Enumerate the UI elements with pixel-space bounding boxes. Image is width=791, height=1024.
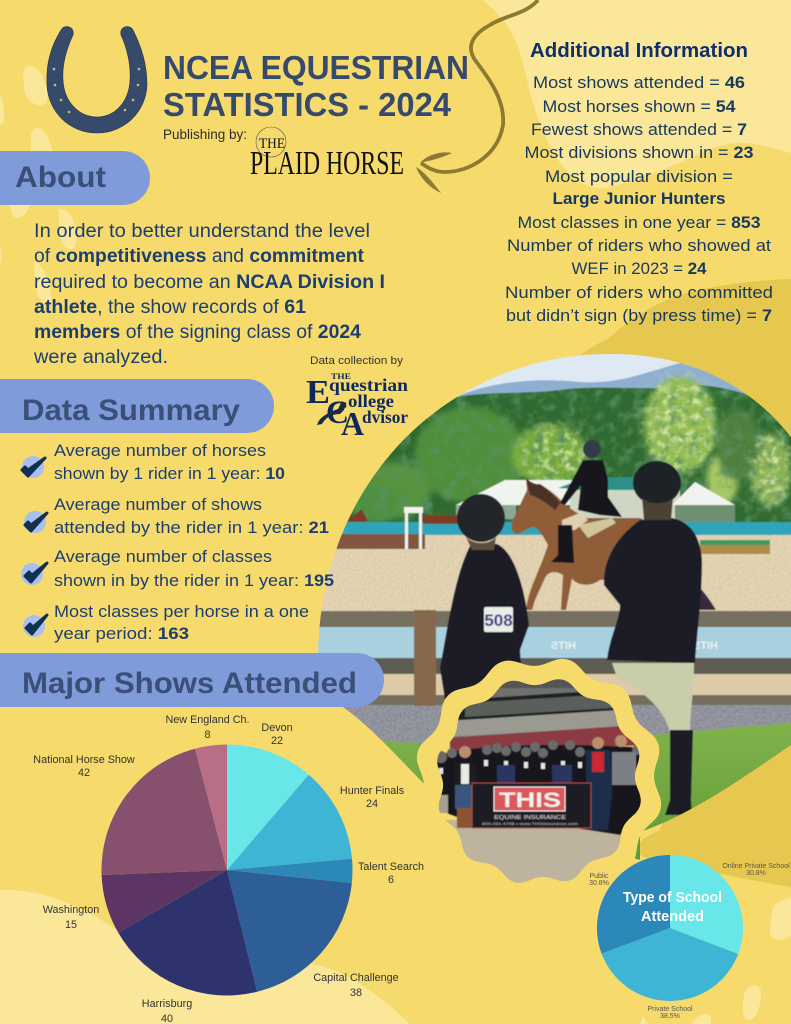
pie labels (33, 714, 424, 1024)
far riders (345, 509, 368, 522)
item: classes per horse: year period: 163 (54, 624, 189, 643)
text block: about (33, 221, 385, 368)
chart labels: 30.8% (746, 870, 766, 877)
stat list: Large Junior Hunters (552, 189, 726, 208)
stat list: Most shows attended = 46 (533, 73, 745, 92)
logo: The Equestrian College Advisor: A (341, 406, 364, 443)
chart title: Attended (641, 909, 704, 925)
photo: team with THIS banner: EQUINE INSURANCE (494, 815, 566, 821)
panel: about heading: About (15, 161, 106, 194)
logo: The Plaid Horse (250, 127, 404, 182)
horse (510, 478, 644, 610)
sand arena (300, 535, 791, 615)
photo: riders at horse show (300, 350, 791, 860)
data collection credit: Data collection by (310, 355, 404, 367)
standing rider left (440, 544, 529, 700)
logo: The Equestrian College Advisor: E (306, 374, 330, 411)
item: classes shown: Average number of classes (54, 547, 272, 566)
title: NCEA EQUESTRIAN (163, 49, 469, 86)
publishing credit: Publishing by: (163, 127, 247, 142)
pie labels: 22 (271, 735, 283, 747)
stat list: Number of riders who showed at (507, 236, 771, 255)
logo: The Equestrian College Advisor: C (326, 395, 349, 431)
scalloped frame (389, 631, 689, 931)
pie labels: New England Ch. (165, 714, 250, 726)
item: classes shown: shown in by the rider in 1 year: 195 (54, 571, 334, 590)
pie labels: Talent Search (358, 861, 424, 873)
title (163, 49, 469, 123)
logo: The Equestrian College Advisor: ollege (348, 391, 394, 411)
horse tail (698, 588, 716, 611)
stat list: Fewest shows attended = 7 (531, 120, 747, 139)
pie labels: 42 (78, 767, 90, 779)
photo: riders at horse show: 508 (484, 611, 513, 630)
item: classes per horse (23, 602, 309, 643)
icon: check (23, 615, 47, 637)
gravel (343, 704, 791, 744)
pie labels: Devon (261, 722, 293, 734)
stat list: but didn’t sign (by press time) = 7 (506, 306, 772, 325)
stat list: Most horses shown = 54 (542, 97, 736, 116)
pie labels: 15 (65, 919, 77, 931)
team group (434, 745, 645, 835)
logo: The Equestrian College Advisor (306, 372, 408, 443)
text block: about: were analyzed. (33, 347, 168, 368)
chart title (623, 890, 722, 925)
left riders breeches (436, 795, 448, 813)
photo: team with THIS banner: 800-261-4708 • www.THISInsurance.com (482, 822, 578, 826)
stat list: Most classes in one year = 853 (518, 213, 760, 232)
pie labels: Hunter Finals (340, 785, 405, 797)
chart title: Type of School (623, 890, 722, 906)
item: horses shown: Average number of horses (54, 441, 266, 460)
photo: riders at horse show: HITS (693, 640, 718, 652)
grass (382, 722, 791, 860)
fence post (414, 610, 436, 706)
breeches and boots (612, 663, 694, 732)
text block: about: In order to better understand the level (34, 221, 370, 242)
stat list: Most divisions shown in = 23 (524, 143, 754, 162)
pie labels: 24 (366, 798, 378, 810)
stat list: Number of riders who committed (505, 283, 773, 302)
heading: additional information: Additional Information (530, 40, 748, 62)
white gate (404, 507, 423, 549)
icon: horseshoe (47, 27, 147, 133)
text block: about: of competitiveness and commitment (34, 246, 365, 267)
chart labels: 38.5% (660, 1013, 680, 1020)
sky (456, 354, 681, 398)
background blob: light top right (483, 0, 791, 188)
logo: The Equestrian College Advisor: THE (331, 372, 351, 381)
horse rider (551, 440, 622, 563)
fence and banner (300, 611, 791, 628)
trainer figures (586, 750, 612, 830)
item: classes shown (21, 547, 334, 590)
stat list: WEF in 2023 = 24 (572, 259, 707, 278)
standing rider right (604, 518, 702, 663)
pie labels: 8 (204, 729, 211, 741)
stat list (505, 73, 773, 325)
text block: about: members of the signing class of 2024 (34, 322, 361, 343)
tree line (348, 384, 791, 523)
item: classes per horse: Most classes per horse in a one (54, 602, 309, 621)
logo: The Equestrian College Advisor: questrian (329, 375, 408, 395)
item: shows attended: attended by the rider in 1 year: 21 (54, 518, 329, 537)
pie chart: type of school attended (589, 855, 790, 1020)
background blob: light lower left (0, 890, 410, 1024)
pie labels: Capital Challenge (313, 972, 399, 984)
panel: data summary heading (0, 379, 274, 433)
photo: riders at horse show: HITS (551, 640, 576, 652)
item: shows attended (24, 495, 329, 537)
item: shows attended: Average number of shows (54, 495, 262, 514)
text block: about: athlete, the show records of 61 (34, 297, 306, 318)
icon: check (21, 563, 47, 585)
text block: about: required to become an NCAA Division I (34, 272, 385, 293)
photo: team with THIS banner: THIS (499, 789, 561, 812)
pie labels: Washington (43, 904, 99, 916)
decorative squiggle arrow (416, 0, 538, 193)
icon: check (22, 456, 45, 478)
logo: The Plaid Horse: PLAID HORSE (250, 145, 404, 182)
item: horses shown: shown by 1 rider in 1 year: 10 (54, 464, 285, 483)
pie labels: National Horse Show (33, 754, 135, 766)
pie chart: major shows attended (33, 714, 424, 1024)
panel: data summary heading: Data Summary (22, 394, 240, 427)
background blob: dark right (580, 279, 791, 887)
logo: The Plaid Horse: THE (259, 136, 285, 152)
number 508 (484, 607, 513, 632)
sand ground (445, 820, 621, 883)
sponsor banner (472, 783, 591, 828)
tents (456, 480, 580, 505)
panel: additional information (505, 40, 773, 325)
chart labels: Private School (647, 1006, 693, 1013)
logo: The Equestrian College Advisor: dvisor (362, 407, 408, 427)
woman at front (455, 762, 478, 785)
stat list: Most popular division = (545, 167, 733, 186)
photo: team with THIS banner (437, 679, 641, 883)
chart labels: 30.8% (589, 880, 609, 887)
list: data summary (21, 441, 334, 643)
chart labels (589, 863, 790, 1020)
panel: major shows heading: Major Shows Attended (22, 667, 357, 700)
pie labels: 6 (388, 874, 394, 886)
title: STATISTICS - 2024 (163, 86, 452, 123)
pie labels: 38 (350, 987, 362, 999)
arena fence teal (300, 522, 791, 535)
chart labels: Online Private School (722, 863, 790, 870)
chart labels: Public (589, 873, 609, 880)
item: horses shown (22, 441, 285, 483)
icon: check (24, 511, 47, 533)
panel: about heading (0, 151, 150, 205)
pie labels: Harrisburg (142, 998, 192, 1010)
panel: major shows heading (0, 653, 384, 707)
